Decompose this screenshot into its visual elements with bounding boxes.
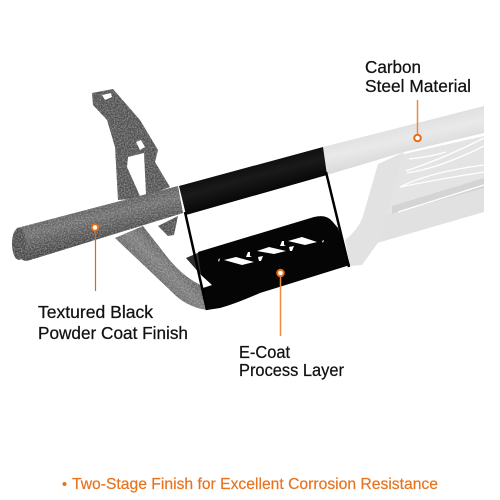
marker: [92, 224, 98, 231]
marker: [277, 270, 284, 276]
label: Steel Material: [365, 76, 471, 96]
callout: e-coat process layer: [239, 270, 344, 380]
textured black bracket: [92, 89, 170, 200]
step bar product illustration: [12, 89, 484, 310]
label: Carbon: [365, 57, 421, 77]
sleeve frame lines: [185, 172, 349, 310]
label: Powder Coat Finish: [38, 323, 188, 343]
white notch in plate: [201, 275, 212, 288]
black e-coat sleeve: [179, 147, 327, 215]
marker: [414, 135, 421, 141]
step plate slots: [218, 237, 324, 265]
tube end cap: [12, 228, 26, 260]
label: Textured Black: [38, 302, 153, 322]
step plate tab: [186, 252, 201, 275]
textured black main tube: [12, 186, 183, 261]
lower curved leg: [115, 226, 207, 310]
lower gusset: [158, 216, 178, 236]
label: Process Layer: [239, 360, 344, 380]
footer tagline: [62, 476, 438, 493]
bullet: [62, 482, 66, 486]
leader line: [280, 277, 282, 336]
black step plate: [198, 216, 350, 310]
light uncoated steel section: [323, 106, 484, 266]
tagline text: Two-Stage Finish for Excellent Corrosion Resistance: [72, 476, 438, 493]
leader line: [416, 100, 418, 134]
callout: carbon steel material: [365, 57, 471, 141]
leader line: [94, 231, 96, 291]
label: E-Coat: [239, 342, 290, 362]
callout: textured black powder coat finish: [38, 224, 188, 343]
